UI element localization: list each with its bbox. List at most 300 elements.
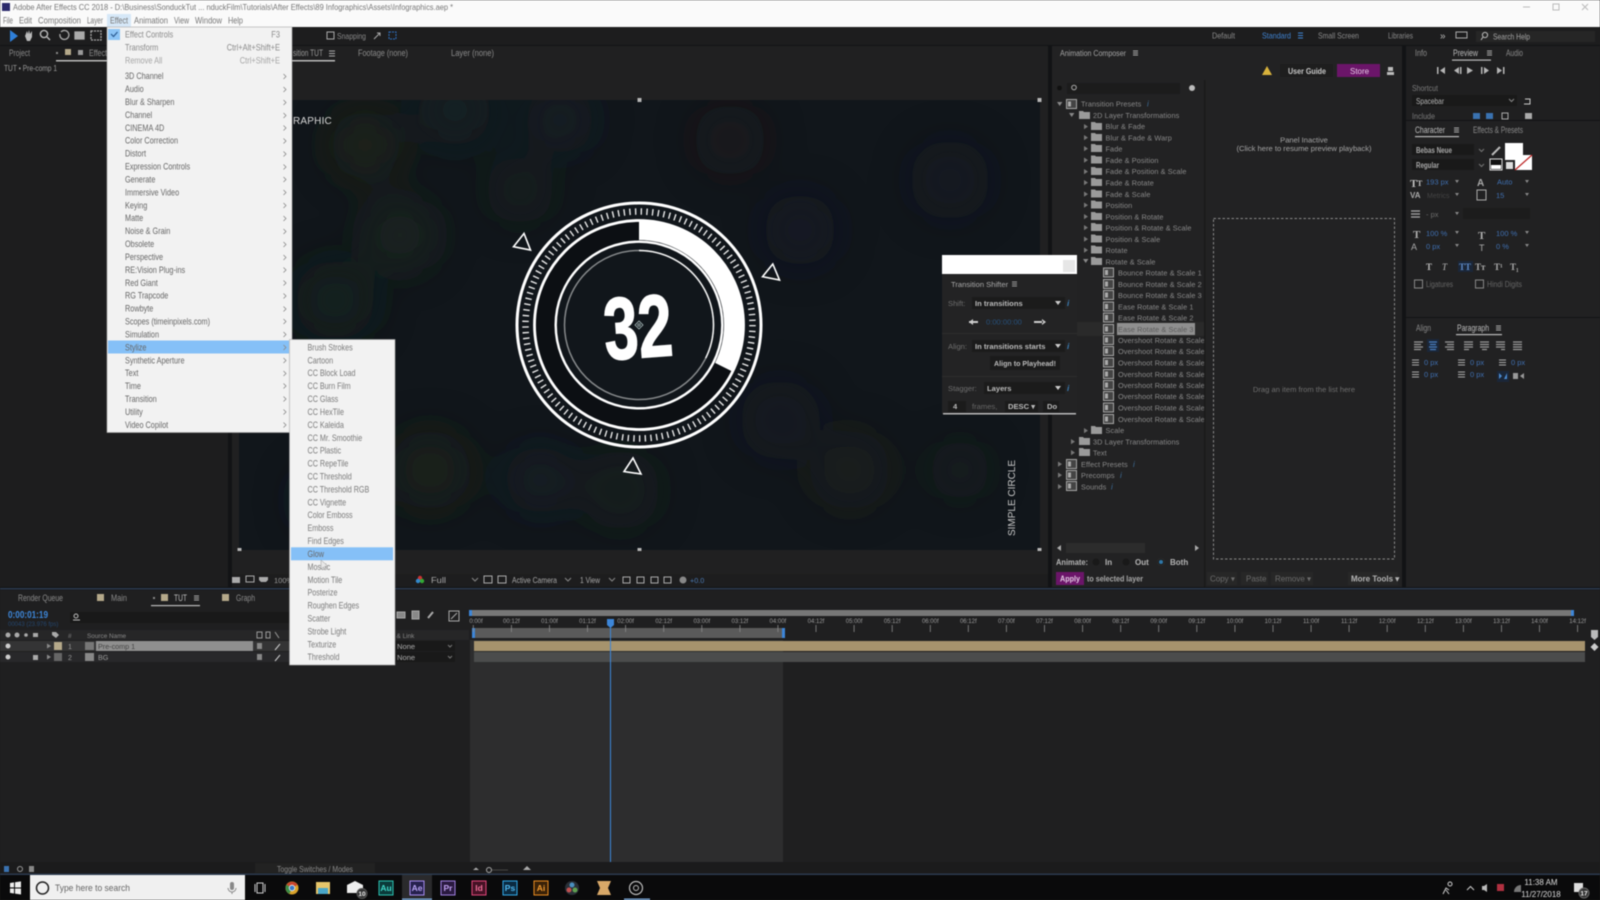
snapping control: Snapping xyxy=(337,31,366,41)
icon: task view xyxy=(255,883,265,893)
effect categories: Expression Controls xyxy=(125,162,190,172)
align row: In transitions starts xyxy=(975,342,1045,351)
layer bar tan xyxy=(474,641,1585,651)
title bar: Adobe After Effects CC 2018 - D:\Business\SonduckTut ... nduckFilm\Tutorials\After Effects\89 Infographics\Assets\Infographics.aep * xyxy=(13,2,454,12)
timeline tabs xyxy=(18,593,255,606)
type style buttons: T¹ xyxy=(1494,262,1503,272)
menu shortcuts: Ctrl+Shift+E xyxy=(240,56,280,66)
menu bar: Window xyxy=(195,16,222,26)
inner progress arc xyxy=(639,250,714,358)
time ruler: 00:12f xyxy=(503,619,520,625)
submenu items: Strobe Light xyxy=(308,627,347,637)
icon: mail xyxy=(347,881,367,898)
timeline mode icons xyxy=(397,611,459,621)
search row xyxy=(1057,83,1195,94)
time ruler: 08:00f xyxy=(1074,619,1091,625)
effect categories: Color Correction xyxy=(125,136,178,146)
app: Photoshop: Ps xyxy=(505,883,515,893)
column headers: # xyxy=(68,633,72,640)
panel: project / effect controls: Effect xyxy=(89,48,107,58)
icon: warning xyxy=(1262,66,1272,75)
effect categories: Rowbyte xyxy=(125,304,154,314)
type metrics: 100 % xyxy=(1496,229,1518,238)
tree presets: Overshoot Rotate & Scale 2 xyxy=(1118,347,1211,356)
workspace switcher: » xyxy=(1440,31,1446,42)
submenu items: CC RepeTile xyxy=(308,459,349,469)
icon: hand tool xyxy=(25,30,32,41)
type metrics: 0 px xyxy=(1426,242,1440,251)
clipboard buttons: More Tools ▾ xyxy=(1351,574,1400,584)
submenu items: Scatter xyxy=(308,614,331,624)
layer search box xyxy=(70,612,295,623)
panel: project / effect controls: TUT • Pre-comp 1 xyxy=(4,64,57,73)
tree remaining groups: Effect Presets xyxy=(1081,460,1128,469)
snapping control xyxy=(327,31,396,41)
timecode: 0:00:01:19 xyxy=(8,609,48,621)
align row: Align to Playhead! xyxy=(994,359,1056,368)
menu bar: Edit xyxy=(19,16,32,26)
time ruler: 04:12f xyxy=(808,619,825,625)
work area shading xyxy=(470,640,783,862)
stagger row: Do xyxy=(1047,402,1057,411)
clipboard buttons: Paste xyxy=(1246,574,1267,584)
effect categories xyxy=(125,71,210,430)
playhead xyxy=(607,619,614,862)
tree remaining groups: Precomps xyxy=(1081,471,1115,480)
app: Illustrator xyxy=(534,881,548,895)
time ruler: 07:00f xyxy=(998,619,1015,625)
timeline tabs: Render Queue xyxy=(18,593,63,603)
type metrics: 100 % xyxy=(1426,229,1448,238)
taskbar xyxy=(0,875,1600,900)
time ruler: 03:12f xyxy=(732,619,749,625)
app: Photoshop xyxy=(503,881,517,895)
submenu items: Roughen Edges xyxy=(308,601,359,611)
app: Audition xyxy=(379,881,393,895)
workspace switcher xyxy=(1212,30,1467,42)
type metrics: A xyxy=(1411,242,1417,252)
clock: 11/27/2018 xyxy=(1521,890,1561,899)
align row: Align: xyxy=(948,342,967,351)
type metrics: T xyxy=(1413,229,1421,241)
panel: timeline xyxy=(0,588,1600,874)
time ruler: 10:00f xyxy=(1227,619,1244,625)
clock xyxy=(1521,878,1561,899)
highlighted glow item xyxy=(291,547,393,560)
menu bar: View xyxy=(174,16,189,26)
checked item marker xyxy=(108,29,120,40)
panel: paragraph xyxy=(1406,318,1600,587)
effect categories: Utility xyxy=(125,407,144,417)
effect categories: Noise & Grain xyxy=(125,226,170,236)
icon: selection tool xyxy=(10,30,18,42)
submenu items: CC Threshold RGB xyxy=(308,485,369,495)
menu shortcuts: F3 xyxy=(271,30,280,40)
panel: preview: Include xyxy=(1412,111,1435,121)
workspace switcher: Libraries xyxy=(1388,30,1413,40)
effect menu xyxy=(107,27,292,432)
tree presets: Overshoot Rotate & Scale 8 xyxy=(1118,415,1211,424)
animate radio row xyxy=(1056,558,1188,567)
column headers xyxy=(0,630,469,640)
panel inactive message: (Click here to resume preview playback) xyxy=(1236,144,1372,153)
submenu items: CC HexTile xyxy=(308,407,344,417)
list divider xyxy=(1204,80,1206,587)
tree folders: Rotate & Scale xyxy=(1106,258,1156,266)
tree level 0: Transition Presets xyxy=(1081,100,1142,108)
icon: orange app xyxy=(597,881,611,895)
time ruler: 11:12f xyxy=(1341,619,1358,625)
time ruler: 06:00f xyxy=(922,619,939,625)
workspace switcher: Small Screen xyxy=(1318,30,1359,40)
type metrics: VA xyxy=(1410,191,1421,200)
panel: preview: Audio xyxy=(1506,48,1523,58)
search box: Type here to search xyxy=(55,883,130,894)
animate radio row: In xyxy=(1105,558,1112,567)
menu bar: File xyxy=(3,16,13,26)
tree folders xyxy=(1083,122,1192,266)
icon: account xyxy=(1387,67,1394,75)
layer row 1: 1 xyxy=(68,644,72,651)
ligature checkboxes: Hindi Digits xyxy=(1487,279,1522,289)
tree level 0: i xyxy=(1147,100,1149,108)
effect categories: Red Giant xyxy=(125,278,158,288)
tree folders: Blur & Fade xyxy=(1106,122,1145,131)
type style buttons xyxy=(1426,261,1519,272)
effect categories: Immersive Video xyxy=(125,188,180,197)
indent controls: 0 px xyxy=(1470,358,1484,367)
alignment icons xyxy=(1414,339,1522,352)
panel: preview: Spacebar xyxy=(1416,96,1444,106)
time ruler: 01:12f xyxy=(579,619,596,625)
menu shortcuts xyxy=(227,30,280,66)
tree remaining groups: Scale xyxy=(1106,426,1124,435)
icon: file explorer xyxy=(316,882,330,894)
tree presets: Bounce Rotate & Scale 3 xyxy=(1118,291,1202,300)
tree folders: Fade & Scale xyxy=(1106,190,1151,199)
effect categories: Scopes (timeinpixels.com) xyxy=(125,317,210,327)
time ruler: 06:12f xyxy=(960,619,977,625)
tree remaining groups: i xyxy=(1133,460,1135,469)
apply button: Apply xyxy=(1060,574,1080,584)
app: Audition: Au xyxy=(380,883,392,893)
menu bar: Composition xyxy=(38,16,81,26)
viewer footer controls: +0.0 xyxy=(690,576,704,585)
tree presets: Ease Rotate & Scale 3 xyxy=(1118,325,1194,334)
tree folders: Position & Rotate & Scale xyxy=(1106,224,1192,232)
timeline tabs: Main xyxy=(111,593,127,603)
icon: OBS xyxy=(624,882,650,900)
column headers: t & Link xyxy=(393,633,415,640)
top menu items: Effect Controls xyxy=(125,30,173,40)
submenu items: CC Vignette xyxy=(308,498,347,507)
effect categories: Matte xyxy=(125,214,144,223)
transport controls xyxy=(1437,67,1504,74)
stagger row: frames, xyxy=(972,402,997,411)
submenu items: Posterize xyxy=(308,588,338,598)
panel: project / effect controls: Project xyxy=(9,48,30,58)
toolbar xyxy=(0,27,1600,45)
type metrics: T xyxy=(1410,178,1418,190)
panel: character: Character xyxy=(1415,125,1445,135)
panel: preview: Info xyxy=(1415,48,1427,58)
submenu items: Mosaic xyxy=(308,562,330,572)
tree folders: Position xyxy=(1106,201,1132,210)
submenu items: Emboss xyxy=(308,523,333,533)
type style buttons: T xyxy=(1442,262,1448,272)
type metrics: 0 % xyxy=(1496,242,1509,251)
type metrics: T xyxy=(1417,179,1423,188)
time ruler: 09:12f xyxy=(1188,619,1205,625)
time ruler: 04:00f xyxy=(770,619,787,625)
tree remaining groups: i xyxy=(1111,482,1113,492)
top menu items: Transform xyxy=(125,43,158,53)
clock: 11:38 AM xyxy=(1524,878,1558,887)
triangle marker left xyxy=(514,234,530,250)
store button xyxy=(1337,64,1380,77)
animate radio row: Both xyxy=(1170,558,1188,567)
timeline tabs: Graph xyxy=(236,593,255,603)
panel: preview: Preview xyxy=(1453,48,1478,58)
time ruler: 12:00f xyxy=(1379,619,1396,625)
app: Premiere: Pr xyxy=(444,883,453,893)
effect categories: Video Copilot xyxy=(125,420,169,430)
tree presets: Bounce Rotate & Scale 2 xyxy=(1118,280,1202,289)
gauge value: 32 xyxy=(600,277,676,380)
ligature checkboxes: Ligatures xyxy=(1426,279,1453,289)
title bar xyxy=(0,0,1600,27)
indent controls: 0 px xyxy=(1470,370,1484,379)
effect categories: Transition xyxy=(125,394,157,404)
effect categories: 3D Channel xyxy=(125,71,164,81)
layer row 2: None xyxy=(397,653,415,662)
submenu items: CC Burn Film xyxy=(308,381,351,391)
type metrics: A xyxy=(1477,178,1484,189)
label: infographic title fragment: RAPHIC xyxy=(293,116,332,127)
panel inactive message xyxy=(1236,136,1372,153)
layer row 1 xyxy=(0,641,455,651)
highlighted stylize item xyxy=(108,340,289,354)
indent controls: 0 px xyxy=(1424,370,1438,379)
tree folders: Position & Rotate xyxy=(1106,212,1164,222)
stagger row xyxy=(948,382,1070,412)
tree folders: Fade xyxy=(1106,144,1123,154)
layer transform handles xyxy=(238,98,1042,552)
notification centre: 17 xyxy=(1580,890,1588,898)
panel: preview: Shortcut xyxy=(1412,83,1438,93)
submenu items: CC Kaleida xyxy=(308,420,344,430)
stagger row: 4 xyxy=(953,402,958,411)
time ruler xyxy=(469,610,1586,638)
type metrics: - px xyxy=(1426,210,1439,219)
font dropdowns xyxy=(1412,144,1484,170)
tree presets: Bounce Rotate & Scale 1 xyxy=(1118,268,1202,278)
tree presets: Overshoot Rotate & Scale 7 xyxy=(1118,404,1211,412)
time ruler: 08:12f xyxy=(1112,619,1129,625)
shift row: In transitions xyxy=(975,299,1023,308)
submenu items: Motion Tile xyxy=(308,575,343,585)
viewer footer controls: Full xyxy=(431,575,446,585)
tree level 0 xyxy=(1057,100,1180,120)
clipboard buttons xyxy=(1207,572,1400,585)
tree remaining groups: Sounds xyxy=(1081,482,1107,492)
triangle marker bottom xyxy=(624,458,641,474)
stylize submenu xyxy=(290,340,395,665)
tree folders: Fade & Rotate xyxy=(1106,178,1154,188)
tree presets: Ease Rotate & Scale 2 xyxy=(1118,314,1194,322)
timeline footer xyxy=(0,862,1600,875)
store button: Store xyxy=(1350,67,1370,76)
indent controls: 0 px xyxy=(1511,358,1525,367)
align row: i xyxy=(1067,341,1070,351)
submenu items: Find Edges xyxy=(308,536,344,546)
time ruler: 11:00f xyxy=(1303,619,1320,625)
system tray xyxy=(1443,882,1521,894)
effect categories: CINEMA 4D xyxy=(125,123,164,133)
viewer footer controls: 100% xyxy=(274,576,294,585)
panel: composition viewer: Footage (none) xyxy=(358,48,408,58)
shift row xyxy=(948,297,1070,326)
effect categories: Channel xyxy=(125,110,152,120)
indent controls xyxy=(1412,358,1525,382)
panel inactive message: Panel Inactive xyxy=(1280,136,1328,144)
submenu arrows xyxy=(284,74,286,428)
stagger row: DESC ▾ xyxy=(1008,402,1036,411)
presets tree xyxy=(1052,100,1211,492)
submenu items: Color Emboss xyxy=(308,511,353,520)
align row xyxy=(948,340,1070,370)
submenu items: CC Threshold xyxy=(308,472,352,482)
panel: composition viewer xyxy=(232,46,1048,587)
panel: character: Effects & Presets xyxy=(1473,125,1523,135)
apply button xyxy=(1056,572,1143,585)
tree presets: Overshoot Rotate & Scale 4 xyxy=(1118,370,1211,379)
colour swatches xyxy=(1490,143,1532,170)
effect categories: Generate xyxy=(125,175,156,185)
type metrics: 15 xyxy=(1496,191,1504,200)
timecode: 00043 (23.976 fps) xyxy=(8,622,58,628)
app: InDesign: Id xyxy=(475,883,483,893)
composition canvas with bokeh background xyxy=(239,74,1040,550)
drop zone: Drag an item from the list here xyxy=(1253,385,1355,394)
panel: preview xyxy=(1406,46,1600,121)
layer row 2: BG xyxy=(98,653,109,662)
transition shifter floating panel xyxy=(942,255,1077,414)
layer row 1: Pre-comp 1 xyxy=(98,642,135,651)
time ruler: 02:12f xyxy=(655,619,672,625)
tree presets: Overshoot Rotate & Scale 6 xyxy=(1118,392,1211,401)
timecode xyxy=(8,609,58,628)
icon: start button xyxy=(10,881,21,894)
panel: composition viewer: sition TUT xyxy=(293,48,323,58)
transition shifter floating panel: Transition Shifter xyxy=(951,280,1009,289)
app: After Effects xyxy=(402,875,432,900)
user guide button: User Guide xyxy=(1288,67,1326,76)
mouse cursor xyxy=(321,560,328,570)
anchor point marker xyxy=(635,321,643,329)
tree remaining groups: 3D Layer Transformations xyxy=(1093,438,1180,446)
effect categories: RE:Vision Plug-ins xyxy=(125,265,185,275)
icon: mail: 10 xyxy=(358,891,366,898)
stagger row: Layers xyxy=(987,384,1012,393)
viewer footer controls: 1 View xyxy=(580,575,601,585)
effect categories: Distort xyxy=(125,149,147,159)
tree folders: Fade & Position & Scale xyxy=(1106,167,1186,176)
ligature checkboxes xyxy=(1414,279,1522,289)
submenu items: Texturize xyxy=(308,640,337,649)
effect categories: Blur & Sharpen xyxy=(125,97,174,107)
panel: animation composer xyxy=(1052,46,1402,587)
layer row 1: None xyxy=(397,642,415,651)
search help box xyxy=(1476,31,1595,42)
user guide button xyxy=(1280,64,1333,77)
viewer footer controls: Active Camera xyxy=(512,575,557,585)
effect categories: Stylize xyxy=(125,343,147,352)
submenu items: CC Glass xyxy=(308,394,338,404)
panel: project / effect controls xyxy=(0,46,228,587)
effect categories: Obsolete xyxy=(125,239,155,249)
shift row: i xyxy=(1067,298,1070,308)
type metrics xyxy=(1410,178,1530,253)
submenu items xyxy=(308,343,369,662)
tree level 0: 2D Layer Transformations xyxy=(1093,111,1180,120)
top menu items: Remove All xyxy=(125,56,162,66)
icon: rotate and camera tools xyxy=(60,30,101,40)
app: After Effects: Ae xyxy=(412,883,423,893)
panel: composition viewer: Layer (none) xyxy=(451,48,494,58)
effect categories: Keying xyxy=(125,201,147,210)
time ruler: 01:00f xyxy=(541,619,558,625)
effect categories: Audio xyxy=(125,84,144,94)
stagger row: i xyxy=(1067,383,1070,393)
time ruler: 05:12f xyxy=(884,619,901,625)
time ruler: 02:00f xyxy=(617,619,634,625)
clipboard buttons: Copy ▾ xyxy=(1210,574,1235,584)
tree remaining groups xyxy=(1058,426,1180,492)
label: simple circle vertical: SIMPLE CIRCLE xyxy=(1007,460,1018,536)
animate radio row: Out xyxy=(1135,558,1149,567)
tree folders: Position & Scale xyxy=(1106,235,1160,244)
time ruler: 07:12f xyxy=(1036,619,1053,625)
submenu items: CC Mr. Smoothie xyxy=(308,433,363,443)
tree folders: Blur & Fade & Warp xyxy=(1106,134,1172,142)
time ruler: 09:00f xyxy=(1150,619,1167,625)
top menu items xyxy=(125,30,173,66)
gauge progress arc xyxy=(639,230,733,367)
tree presets: Ease Rotate & Scale 1 xyxy=(1118,302,1194,312)
icon: chrome xyxy=(286,882,298,894)
type style buttons: T xyxy=(1426,262,1432,272)
search help box: Search Help xyxy=(1493,32,1530,42)
triangle marker right xyxy=(762,264,780,280)
menu bar: Effect xyxy=(110,16,128,26)
indent controls: 0 px xyxy=(1424,358,1438,367)
submenu items: CC Block Load xyxy=(308,369,355,378)
workspace switcher: Default xyxy=(1212,30,1236,40)
layer bar grey xyxy=(474,652,1585,662)
notification centre xyxy=(1574,883,1589,898)
layer row 2: 2 xyxy=(68,655,72,662)
time ruler: 03:00f xyxy=(693,619,710,625)
list scrollbar xyxy=(1057,543,1199,553)
panel: character xyxy=(1406,121,1600,317)
tree remaining groups: i xyxy=(1120,471,1122,480)
app: Illustrator: Ai xyxy=(537,883,545,893)
effect categories: Text xyxy=(125,369,139,378)
type style buttons: TT xyxy=(1459,262,1471,272)
font dropdowns: Regular xyxy=(1416,160,1439,170)
time ruler: 0:00f xyxy=(469,619,483,625)
